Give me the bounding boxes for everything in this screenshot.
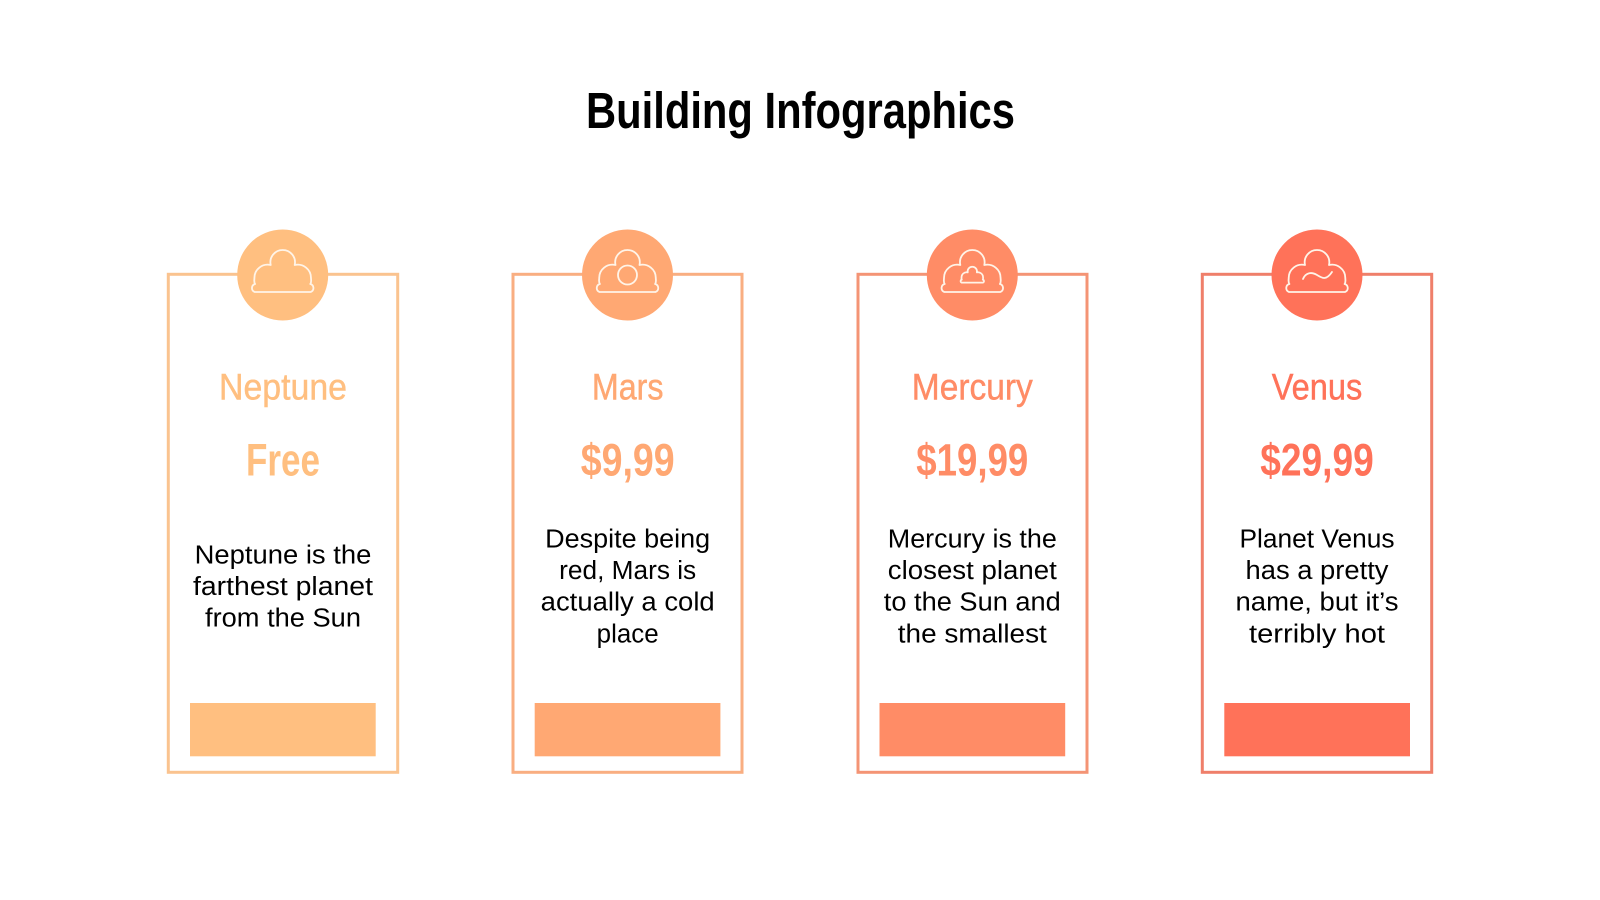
description: Planet Venus: [1240, 525, 1394, 553]
description: [541, 525, 715, 648]
price: $19,99: [916, 435, 1028, 486]
description: to the Sun and: [884, 589, 1061, 617]
description: name, but it’s: [1236, 589, 1398, 617]
card frame: [513, 274, 742, 772]
description: [1236, 525, 1398, 648]
plan name: Mars: [592, 366, 664, 407]
description: terribly hot: [1249, 620, 1385, 648]
plan name: Neptune: [219, 366, 347, 407]
icon: cloud with circle: [582, 230, 673, 320]
price: Free: [246, 435, 320, 486]
description: farthest planet: [193, 573, 373, 601]
button bar: [880, 703, 1065, 756]
description: Despite being: [545, 525, 710, 553]
card frame: [858, 274, 1087, 772]
title: Building Infographics: [586, 82, 1015, 139]
card frame: [168, 274, 398, 772]
price: $9,99: [581, 435, 675, 486]
icon: cloud with wave: [1272, 230, 1362, 320]
description: from the Sun: [205, 605, 361, 633]
panel: Mercury: [858, 230, 1087, 772]
button bar: [190, 703, 376, 756]
panel: Mars: [513, 230, 742, 772]
description: place: [597, 620, 659, 648]
description: [193, 541, 373, 633]
panel: Venus: [1202, 230, 1432, 772]
description: closest planet: [888, 557, 1057, 585]
description: the smallest: [898, 620, 1047, 648]
panel: Neptune: [168, 230, 398, 772]
plan name: Venus: [1272, 366, 1362, 407]
description: Neptune is the: [195, 541, 371, 569]
button bar: [535, 703, 720, 756]
plan name: Mercury: [912, 366, 1033, 407]
icon: cloud with small cloud: [927, 230, 1018, 320]
description: actually a cold: [541, 589, 715, 617]
description: has a pretty: [1246, 557, 1389, 585]
button bar: [1224, 703, 1410, 756]
price: $29,99: [1260, 435, 1374, 486]
description: Mercury is the: [888, 525, 1057, 553]
icon: cloud: [237, 230, 328, 320]
description: red, Mars is: [559, 557, 696, 585]
description: [884, 525, 1061, 648]
card frame: [1202, 274, 1432, 772]
